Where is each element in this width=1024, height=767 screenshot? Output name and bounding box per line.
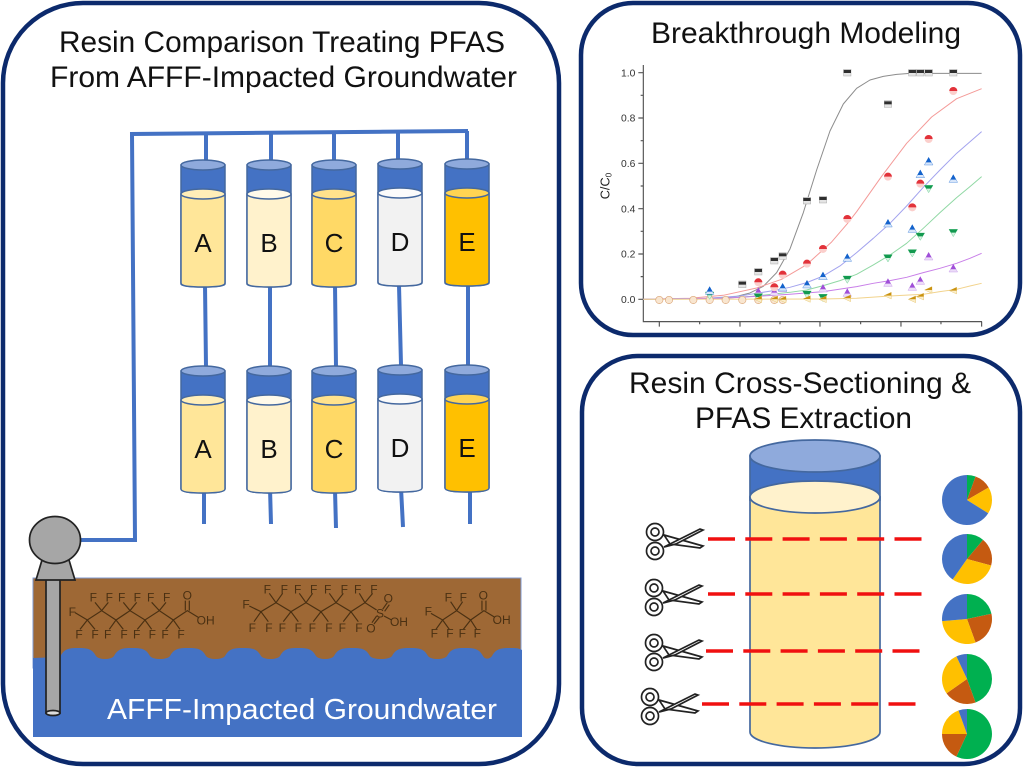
column A, second row: A <box>194 434 212 464</box>
column A, first row: A <box>194 228 212 258</box>
column C, first row <box>312 160 356 287</box>
y axis labels: 0.0 <box>621 295 636 306</box>
molecule: PFOA: OH <box>197 613 215 627</box>
column B, second row <box>247 366 291 493</box>
data points: blue series <box>705 158 958 294</box>
molecule: PFBA: F <box>425 605 432 619</box>
molecule: PFBA: F <box>460 591 467 605</box>
feed and connecting pipes <box>80 131 470 540</box>
molecule: PFOS: OH <box>390 615 408 629</box>
chart axes <box>638 65 982 327</box>
column D, second row <box>378 365 422 492</box>
y axis labels: 0.4 <box>621 204 636 215</box>
y axis labels: 1.0 <box>621 68 636 79</box>
molecule: PFBA: OH <box>493 613 511 627</box>
pie chart 3 <box>942 594 992 644</box>
panel: resin comparison <box>3 3 559 764</box>
column D, first row: D <box>391 227 409 257</box>
molecule: PFOA: F <box>69 605 76 619</box>
y axis title: 0 <box>604 172 614 177</box>
molecule: PFOS: F <box>370 582 378 596</box>
molecule: PFOS: F <box>264 582 271 596</box>
icon: scissors 4 <box>642 688 698 724</box>
molecule: PFOA <box>69 588 215 641</box>
molecule: PFOA: F <box>149 627 156 641</box>
molecule: PFOS: F <box>279 621 286 635</box>
column E, second row <box>445 365 489 492</box>
column B, second row: B <box>260 434 278 464</box>
column B, first row: B <box>260 228 278 258</box>
molecule: PFOA: F <box>134 591 141 605</box>
molecule: PFOS: F <box>309 621 316 635</box>
column C, second row <box>312 366 356 493</box>
well pump and casing <box>30 516 80 716</box>
data points: purple series <box>754 253 958 296</box>
molecule: PFOA: F <box>133 627 140 641</box>
breakthrough chart <box>598 65 982 327</box>
molecule: PFOS: O <box>366 622 376 636</box>
column C, second row: C <box>325 434 343 464</box>
molecule: PFOS: F <box>249 621 256 635</box>
data points: zero-level cluster <box>656 296 786 304</box>
molecule: PFOA: F <box>106 591 113 605</box>
y axis labels: 0.8 <box>621 114 636 125</box>
molecule: PFOA: F <box>118 591 125 605</box>
heading: resin comparison: Resin Comparison Treating PFAS <box>59 26 505 59</box>
column C, first row: C <box>325 228 343 258</box>
large resin column <box>750 440 880 748</box>
groundwater <box>33 648 522 737</box>
fitted curves <box>643 73 982 299</box>
molecule: PFOA: F <box>161 627 169 641</box>
column E, first row <box>445 159 489 286</box>
y axis title: C/C <box>598 177 612 199</box>
molecule: PFOS: F <box>341 582 348 596</box>
label: AFFF-impacted groundwater: AFFF-Impacted Groundwater <box>107 694 497 726</box>
molecule: PFBA: O <box>479 588 488 602</box>
molecule: PFBA: F <box>474 626 481 640</box>
column A, second row <box>181 366 225 493</box>
molecule: PFBA <box>425 588 511 640</box>
molecule: PFOA: F <box>120 627 128 641</box>
molecule: PFOA: F <box>104 627 111 641</box>
molecule: PFBA: F <box>431 626 438 640</box>
panel: cross-sectioning <box>582 356 1020 764</box>
panel: breakthrough modeling <box>581 3 1020 335</box>
heading: breakthrough modeling: Breakthrough Modeling <box>651 17 961 50</box>
heading: cross-sectioning <box>629 367 971 435</box>
molecule: PFOS: F <box>354 582 361 596</box>
molecule: PFOS: O <box>384 592 393 606</box>
molecule: PFOS: F <box>294 582 301 596</box>
molecule: PFOA: F <box>177 627 185 641</box>
heading: cross-sectioning: Resin Cross-Sectioning & <box>629 367 971 400</box>
molecule: PFOA: F <box>91 627 99 641</box>
molecule: PFOA: F <box>163 591 170 605</box>
heading: resin comparison <box>50 26 517 94</box>
molecule: PFOS: F <box>310 582 317 596</box>
pie chart 5 <box>942 709 992 759</box>
column D, first row <box>378 159 422 286</box>
molecule: PFOS: F <box>265 621 273 635</box>
molecule: PFOS: S <box>376 606 384 620</box>
column D, second row: D <box>391 433 409 463</box>
icon: scissors 1 <box>646 524 703 560</box>
column A, first row <box>181 160 225 287</box>
icon: scissors 3 <box>646 634 702 670</box>
pie chart 4 <box>942 654 992 704</box>
data points: black series <box>739 69 957 288</box>
y axis labels <box>621 68 636 306</box>
molecule: PFOS: F <box>242 597 250 611</box>
molecule: PFOS: F <box>324 582 331 596</box>
data points: red series <box>754 87 957 291</box>
y axis labels: 0.6 <box>621 159 636 170</box>
icon: scissors 2 <box>646 580 702 616</box>
molecule: PFOS <box>242 582 408 636</box>
heading: resin comparison: From AFFF-Impacted Groundwater <box>50 61 517 94</box>
molecule: PFOS: F <box>339 621 346 635</box>
molecule: PFOA: F <box>147 591 154 605</box>
pie chart 1 <box>942 475 992 525</box>
soil layer <box>33 578 521 668</box>
y axis labels: 0.2 <box>621 250 636 261</box>
data points: orange series <box>754 287 957 303</box>
molecule: PFOS: F <box>325 621 333 635</box>
column E, first row: E <box>458 227 476 257</box>
molecule: PFOA: F <box>75 627 83 641</box>
molecule: PFOS: F <box>281 582 288 596</box>
data points: green series <box>705 185 958 302</box>
molecule: PFOA: F <box>90 591 97 605</box>
molecule: PFBA: F <box>445 591 452 605</box>
molecule: PFOA: O <box>183 588 192 602</box>
molecule: PFOS: F <box>355 621 363 635</box>
cut lines <box>702 539 922 704</box>
molecule: PFBA: F <box>446 626 454 640</box>
molecule: PFBA: F <box>459 626 466 640</box>
column B, first row <box>247 160 291 287</box>
pie chart 2 <box>942 534 992 584</box>
heading: cross-sectioning: PFAS Extraction <box>695 402 912 435</box>
molecule: PFOS: F <box>295 621 302 635</box>
column E, second row: E <box>458 433 476 463</box>
